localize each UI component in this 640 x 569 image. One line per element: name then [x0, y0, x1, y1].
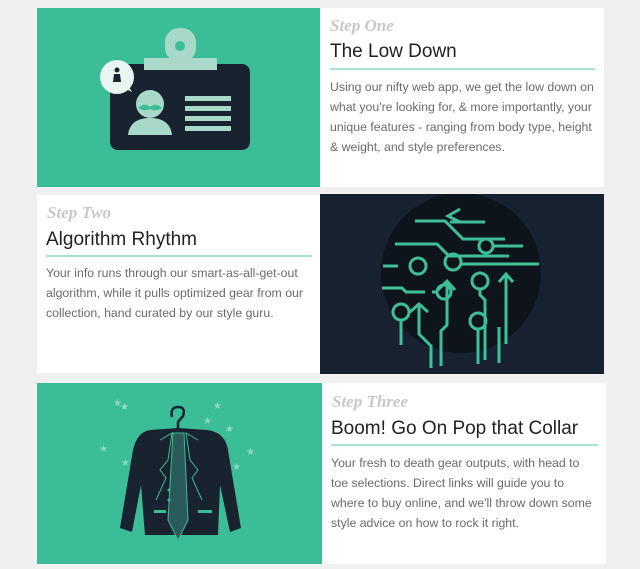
stars: ★ [246, 447, 255, 458]
panel: step one illustration [37, 8, 320, 187]
panel: step one text [320, 8, 604, 187]
stars: ★ [120, 402, 129, 413]
step label: Step Two [47, 203, 111, 222]
stars: ★ [213, 401, 222, 412]
icon: circuit [381, 193, 541, 368]
stars: ★ [99, 444, 108, 455]
step label: Step Three [332, 392, 408, 411]
icon: id badge [100, 28, 250, 150]
stars: ★ [232, 462, 241, 473]
heading: Boom! Go On Pop that Collar [331, 418, 578, 439]
stars: ★ [121, 458, 130, 469]
panel: step two text [37, 195, 320, 373]
icon: jacket on hanger [120, 407, 241, 540]
text block: Your info runs through our smart-as-all-get-out algorithm, while it pulls optimized gear from our collection, hand curated by our style guru. [46, 266, 303, 320]
text block: Using our nifty web app, we get the low down on what you're looking for, & more importantly, your unique features - ranging from body type, height & weight, and style preferences. [330, 80, 594, 154]
text block: Your fresh to death gear outputs, with head to toe selections. Direct links will guide you to where to buy online, and we'll throw down some style advice on how to rock it right. [331, 456, 592, 530]
stars: ★ [203, 416, 212, 427]
heading: The Low Down [330, 41, 457, 62]
panel: step three illustration [37, 383, 322, 564]
panel: step two illustration [320, 194, 604, 374]
stars [99, 398, 255, 473]
stars: ★ [113, 398, 122, 409]
heading: Algorithm Rhythm [46, 229, 197, 250]
panel: step three text [322, 383, 606, 564]
step label: Step One [330, 16, 394, 35]
stars: ★ [225, 424, 234, 435]
